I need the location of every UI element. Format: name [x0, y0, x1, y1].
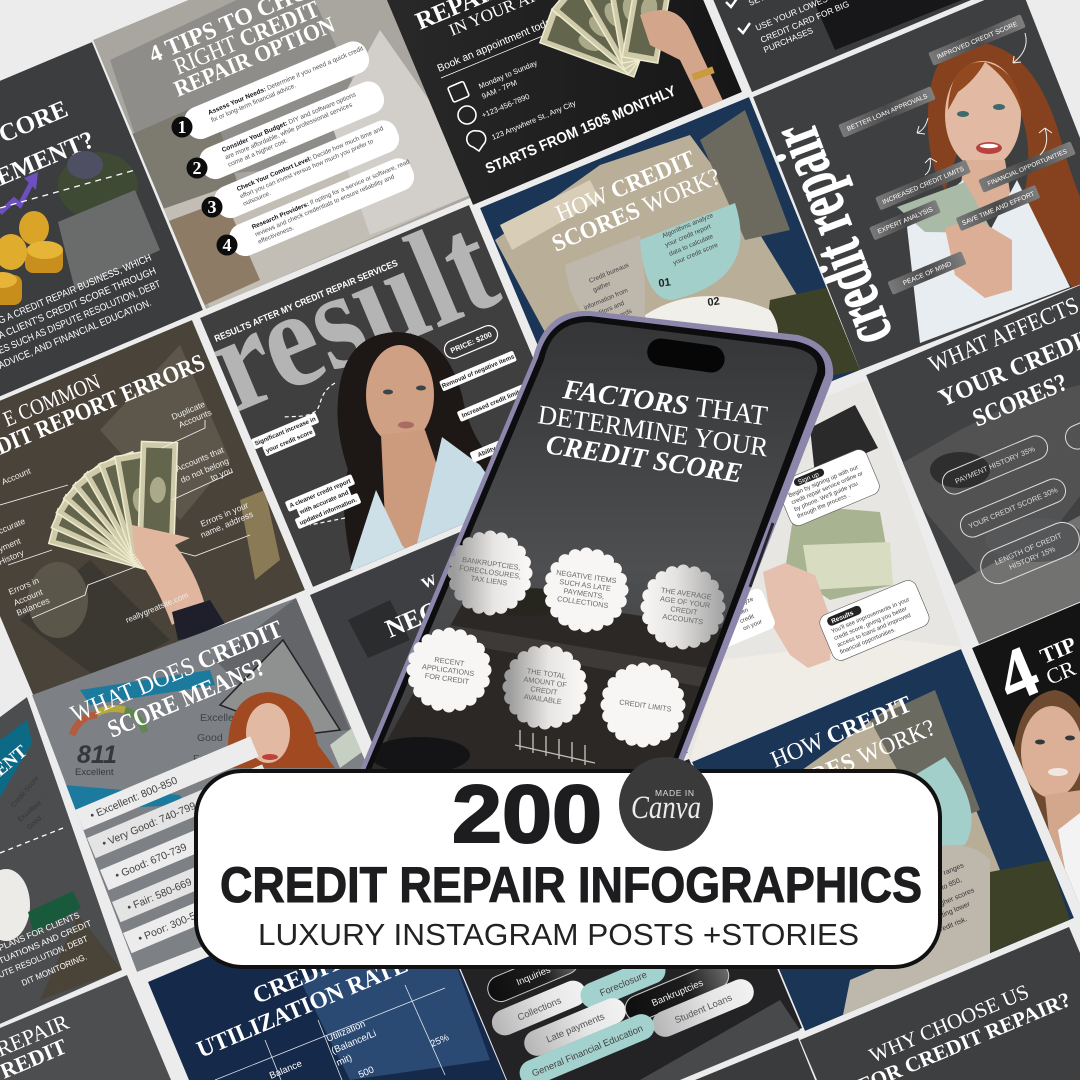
pills: Foreclosure: [598, 970, 649, 999]
heading: TIP: [1036, 631, 1080, 669]
factor pills: HISTORY 15%: [1008, 544, 1057, 572]
tip number badges: 2: [192, 158, 202, 178]
badge: recent applications: FOR CREDIT: [424, 671, 470, 686]
label pills: EXPERT ANALYSIS: [877, 206, 935, 236]
step card: results: credit score, giving you better: [833, 606, 908, 642]
panel: credit utilization rate: [148, 869, 506, 1080]
credit report 811: Good: [197, 732, 223, 744]
banner number: 200: [452, 769, 602, 860]
tip 1: [184, 41, 370, 140]
error labels and leader lines: Balances: [15, 595, 51, 618]
petal text: cating lower: [934, 901, 972, 922]
tip number badges: 1: [178, 117, 186, 137]
screen title: [536, 374, 770, 490]
badge: average age: ACCOUNTS: [662, 612, 704, 626]
tip 2: [200, 81, 384, 180]
callout labels: Removal of negative items: [441, 353, 516, 390]
step card: sign up: credit repair service online or: [791, 471, 864, 506]
badge: bankruptcies: BANKRUPTCIES,: [462, 555, 521, 572]
step card: sign up: through the process .: [797, 493, 851, 520]
report labels: Credit Score: [10, 775, 41, 809]
checklist text: CREDIT CARD FOR BIG: [759, 0, 851, 45]
step card: results: financial opportunities.: [839, 627, 897, 656]
heading: [985, 630, 1080, 720]
petal diagram: 01: [658, 276, 672, 290]
pills: Bankruptcies: [650, 978, 705, 1009]
description text: ADVICE, AND FINANCIAL EDUCATION.: [0, 298, 153, 372]
petal diagram: your credit score: [672, 242, 719, 267]
pills: [484, 944, 758, 1080]
badge: average age: THE AVERAGE: [660, 586, 712, 602]
price badge: [444, 325, 498, 359]
panel: what does credit score means: [32, 598, 410, 972]
heading: CREDIT: [249, 949, 347, 1010]
credit report 811: Fair: [193, 753, 212, 765]
error labels and leader lines: Errors in your: [199, 500, 250, 529]
badge: negative items: NEGATIVE ITEMS: [556, 568, 617, 585]
badge: recent applications: [413, 634, 485, 706]
pills: Collections: [516, 995, 563, 1023]
dashed arrows: [283, 383, 345, 525]
tip 2: are more affordable, while professional services: [224, 101, 354, 161]
dashed divider: [0, 170, 135, 208]
error labels and leader lines: do not belong: [179, 456, 231, 485]
panel: credit repair portrait: [753, 0, 1080, 370]
phone mockup: [358, 310, 840, 790]
petal diagram: Algorithms analyze: [661, 212, 715, 240]
badge: negative items: [550, 554, 622, 626]
tip 4: reviews and check credentials to ensure reliability and: [254, 173, 396, 238]
price line: STARTS FROM 150$ MONTHLY: [483, 83, 679, 178]
step card: results: You'll see improvements in your: [831, 597, 911, 635]
panel: result portrait: [200, 205, 533, 587]
petal text: [928, 862, 976, 935]
petal diagram: creditors and: [588, 300, 626, 321]
step card: results: Results: [830, 610, 855, 625]
heading: WHY CHOOSE US: [866, 979, 1032, 1068]
heading: SCORES WORK?: [763, 715, 939, 809]
heading: [925, 293, 1080, 433]
badge: negative items: PAYMENTS,: [563, 586, 605, 601]
score bands: • Good: 670-739: [113, 841, 189, 882]
score bands: [75, 736, 288, 953]
badge: credit limits: CREDIT LIMITS: [619, 697, 672, 714]
factor pills: PAYMENT HISTORY 35%: [954, 444, 1037, 486]
petal diagram: gather: [592, 280, 613, 294]
badge: negative items: SUCH AS LATE: [559, 577, 612, 593]
icon: hands with ring: [763, 563, 833, 668]
big word: result: result: [187, 186, 516, 442]
phone frame: [358, 311, 833, 775]
description text: ES SUCH AS DISPUTE RESOLUTION, DEBT: [0, 279, 162, 357]
table: [215, 985, 451, 1080]
step card: analyze: on your: [742, 619, 763, 632]
panel: steps with hands and cash: [596, 380, 962, 760]
panel: how credit scores work: [480, 97, 860, 382]
badge: total amount: CREDIT: [530, 684, 559, 697]
panel: what affects your credit scores: [866, 262, 1080, 645]
error labels and leader lines: Account: [0, 465, 33, 487]
label pills: SAVE TIME AND EFFORT: [961, 191, 1036, 227]
tip 4: Research Providers: If opting for a service or software, read: [251, 158, 411, 231]
dynamic island: [645, 337, 726, 374]
heading: 4: [985, 630, 1051, 720]
badge: negative items: COLLECTIONS: [557, 594, 609, 610]
heading: SCORES WORK?: [548, 164, 724, 258]
tip 3: [214, 120, 400, 218]
price badge: PRICE: $200: [449, 330, 493, 355]
petal diagram: 02: [707, 295, 721, 309]
portrait: red haired woman: [228, 692, 362, 768]
banner subtitle: LUXURY INSTAGRAM POSTS +STORIES: [258, 918, 859, 952]
label pills: FINANCIAL OPPORTUNITIES: [987, 148, 1068, 188]
badge: credit limits: [607, 669, 679, 741]
pills: Late payments: [545, 1011, 607, 1046]
label pills: PEACE OF MIND: [902, 261, 953, 287]
portrait: brunette woman: [1012, 690, 1080, 925]
tip 4: [230, 158, 414, 256]
description text: G A CREDIT REPAIR BUSINESS, WHICH: [0, 253, 153, 327]
step card: results: [817, 578, 932, 663]
panel: 4 tips portrait: [972, 535, 1080, 925]
heading: WHAT DOES CREDIT: [67, 616, 287, 729]
banner: [196, 769, 940, 967]
table: mit): [335, 1052, 354, 1069]
petal diagram: data to calculate: [668, 233, 715, 258]
factor pills: LENGTH OF CREDIT: [993, 531, 1064, 567]
petal text: higher scores: [934, 887, 976, 910]
heading: E COMMON: [0, 369, 104, 432]
credit report 811: Excellent: [200, 712, 243, 724]
callout labels: Ability to: [477, 442, 504, 459]
teal and beige petals: [840, 757, 990, 1030]
money fan in hand: [540, 0, 725, 112]
tip 2: come at a higher cost.: [227, 137, 289, 169]
step card: analyze: credit: [739, 614, 755, 625]
credit report 811: 811: [77, 741, 117, 769]
factor pills: [942, 422, 1080, 584]
badge: total amount: AMOUNT OF: [523, 675, 568, 690]
error labels and leader lines: Duplicate: [170, 399, 207, 422]
tip number badges: [172, 116, 238, 256]
made in canva badge: [619, 757, 713, 851]
description text: [0, 253, 162, 372]
panel: why choose us for credit repair: [695, 927, 1080, 1080]
step card: sign up: Sign up: [797, 471, 820, 486]
contact rows with icons: +123-456-7890: [480, 92, 531, 120]
heading: REPAIR OPTION: [170, 12, 339, 102]
panel: how credit scores work (second): [692, 649, 1074, 1031]
tip 2: Consider Your Budget: DIY and software options: [221, 91, 358, 154]
icon: gold coins and arrow: [0, 172, 63, 305]
panel: credit card tips: [640, 0, 1021, 92]
callout labels: updated information.: [299, 496, 358, 527]
badge: bankruptcies: FORECLOSURES,: [459, 563, 522, 581]
heading: W: [419, 572, 439, 593]
heading: NEC: [381, 596, 443, 644]
pills: Student Loans: [673, 992, 734, 1026]
icon: check marks: [726, 0, 750, 33]
panel: credit report items pills: [420, 759, 802, 1080]
contact rows with icons: [441, 35, 577, 151]
petal diagram: [565, 203, 778, 333]
step card: sign up: by phone. We'll guide you: [794, 481, 859, 513]
small portrait and green tag: [0, 869, 81, 941]
portrait: [337, 332, 505, 570]
tablet: [220, 640, 340, 735]
badge: bankruptcies: TAX LIENS: [470, 574, 508, 588]
tip 1: fix or long-term financial advice.: [210, 82, 297, 124]
building photo: [360, 588, 800, 790]
error labels and leader lines: reallygreatsite.com: [124, 590, 190, 625]
dashed divider: [0, 828, 63, 853]
panel: credit score plans: [0, 697, 122, 1024]
petal diagram: Credit bureaus: [588, 262, 631, 285]
heading: CR: [1042, 655, 1079, 690]
icon: plant in pot: [58, 151, 160, 290]
step card: analyze: analyze: [733, 596, 755, 610]
screen title: FACTORS THAT: [560, 374, 769, 432]
tip 4: effectiveness.: [257, 224, 295, 246]
panel: credit repair bottom left: [0, 975, 171, 1080]
score bands: • Very Good: 740-799: [100, 800, 198, 850]
step card: results: access to loans and improved: [836, 613, 912, 649]
step card: analyze: then: [736, 608, 749, 618]
score bands: • Poor: 300-579: [136, 905, 209, 945]
factor pills: YOUR CREDIT SCORE 30%: [967, 485, 1059, 531]
curved arrows: [917, 33, 1052, 175]
step card: analyze: [705, 587, 777, 650]
score bands: • Fair: 580-669: [125, 876, 194, 914]
tip 3: outsource.: [242, 190, 272, 208]
icon: cash: [785, 505, 893, 600]
callout labels: your credit score: [265, 428, 314, 455]
badge: total amount: THE TOTAL: [526, 666, 566, 681]
badge: recent applications: APPLICATIONS: [421, 662, 475, 678]
made in canva badge: Canva: [631, 790, 701, 826]
phone screen: [360, 310, 840, 790]
screen title: CREDIT SCORE: [544, 429, 744, 490]
side buttons: [750, 523, 773, 587]
error labels and leader lines: name, address: [199, 509, 255, 540]
tip 3: effort you can invest versus how much you prefer to: [239, 138, 375, 200]
badge: average age: AGE OF YOUR: [659, 594, 711, 610]
callout labels: Significant increase in: [254, 416, 317, 448]
badge: total amount: AVAILABLE: [523, 692, 562, 706]
petal text: ally ranges: [931, 862, 965, 882]
tip 1: Assess Your Needs: Determine if you need a quick credit: [207, 45, 365, 117]
callout labels: A cleaner credit report: [289, 478, 352, 510]
panel: common credit report errors: [0, 320, 305, 702]
error labels and leader lines: Accounts that: [174, 444, 226, 474]
money fan and hand: [49, 441, 230, 640]
made in canva badge: MADE IN: [655, 788, 695, 798]
label pills: IMPROVED CREDIT SCORE: [936, 21, 1019, 61]
description text: A CLIENT'S CREDIT SCORE THROUGH: [0, 266, 158, 342]
score bands: • Excellent: 800-850: [88, 775, 179, 822]
tip 3: Check Your Comfort Level: Decide how much time and: [236, 125, 385, 193]
heading: UTILIZATION RATE: [193, 952, 412, 1064]
badge: average age: CREDIT: [670, 604, 699, 617]
heading: RESULTS AFTER MY CREDIT REPAIR SERVICES: [213, 258, 399, 344]
petal diagram: information from: [583, 287, 629, 312]
description text: DIT MONITORING.: [20, 951, 88, 988]
panel: nec tile behind phone: [310, 482, 692, 864]
heading: HOW CREDIT: [767, 691, 916, 774]
step card: sign up: [775, 447, 882, 528]
report labels: Excellent :: [17, 797, 46, 824]
description text: [0, 910, 93, 988]
table: Utilization: [325, 1019, 367, 1045]
step card: sign up: Begin by signing up with our: [788, 465, 859, 499]
petal diagram: your credit report: [664, 223, 712, 249]
credit report 811: [75, 712, 243, 778]
heading: SCORES?: [969, 369, 1072, 433]
petal diagram: public records: [593, 307, 634, 330]
report labels: [10, 775, 46, 832]
table: 25%: [429, 1032, 451, 1050]
badge: recent applications: RECENT: [434, 655, 465, 668]
contact rows with icons: Monday to Sunday: [477, 58, 539, 91]
pills: General Financial Education: [530, 1023, 645, 1080]
label pills: BETTER LOAN APPROVALS: [846, 93, 929, 133]
heading: SCORE MEANS?: [104, 654, 269, 744]
checklist text: PURCHASES: [762, 25, 815, 55]
heading: score improvement: [0, 100, 91, 186]
contact rows with icons: 123 Anywhere St., Any City: [490, 98, 577, 142]
callout labels: Increased credit limits: [461, 388, 524, 420]
report labels: Good :: [26, 813, 46, 832]
banner title: CREDIT REPAIR INFOGRAPHICS: [220, 857, 922, 913]
badge: total amount: [509, 651, 581, 723]
panel: credit repair in your area: [360, 0, 742, 205]
pills: Inquiries: [515, 964, 552, 988]
error labels and leader lines: to you: [209, 465, 234, 483]
badge: bankruptcies: [454, 537, 526, 609]
error labels and leader lines: [0, 399, 255, 625]
label pills: INCREASED CREDIT LIMITS: [882, 165, 966, 206]
credit report stripes: [65, 670, 215, 810]
table: (Balance/Li: [330, 1028, 378, 1057]
error labels and leader lines: Accounts: [177, 407, 213, 430]
appointment text: Book an appointment today!: [436, 13, 561, 75]
panel: credit score improvement: [0, 42, 203, 424]
petal text: credit risk.: [936, 916, 968, 935]
callout labels: [251, 350, 527, 529]
error labels and leader lines: Account: [12, 586, 45, 608]
heading: HOW CREDIT: [552, 146, 699, 228]
credit report 811: Excellent: [75, 767, 114, 778]
heading: [381, 572, 443, 644]
badge: average age: [647, 571, 719, 643]
error labels and leader lines: Errors in: [7, 575, 41, 597]
panel: 4 tips to choose right credit repair option: [93, 0, 475, 309]
tip number badges: 4: [222, 235, 232, 255]
portrait: woman holding money: [897, 42, 1080, 343]
label pills: [838, 14, 1076, 295]
contact rows with icons: 9AM - 7PM: [480, 78, 518, 101]
screen title: DETERMINE YOUR: [536, 399, 770, 462]
tip number badges: 3: [208, 197, 216, 217]
callout labels: with accurate and: [298, 489, 350, 516]
petal text: 300 to 850,: [928, 877, 963, 897]
